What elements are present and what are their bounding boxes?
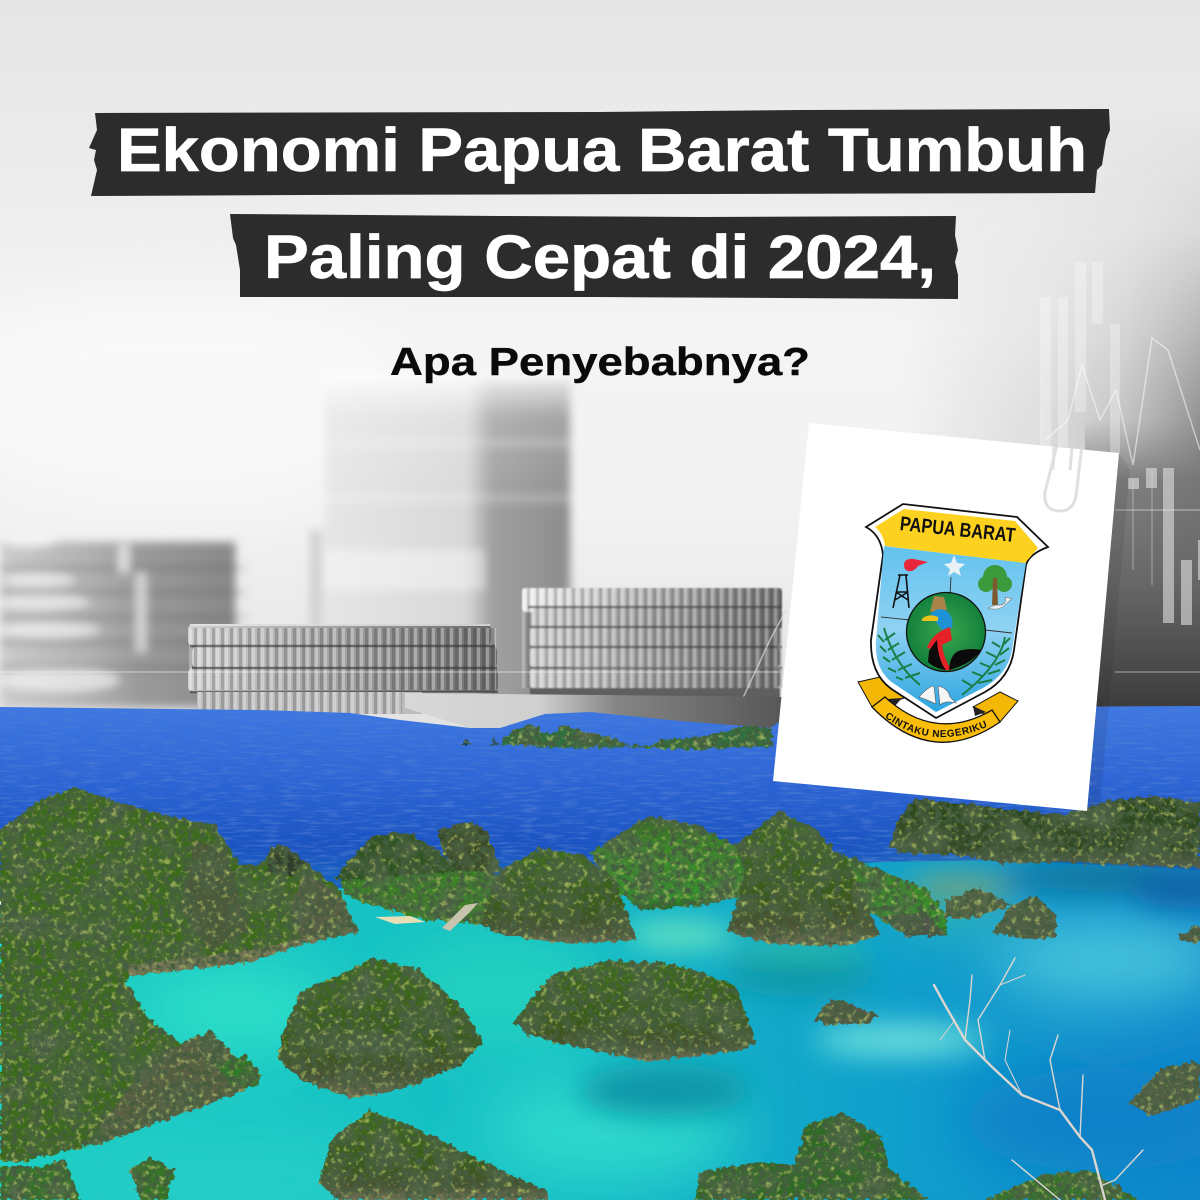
shield outline bbox=[866, 504, 1048, 718]
foreground island and trees bbox=[0, 1110, 1140, 1200]
title banner line 2 bbox=[230, 214, 958, 299]
lagoon water bbox=[0, 860, 1200, 1200]
emblem title: PAPUA BARAT bbox=[899, 513, 1016, 547]
divider lines bbox=[881, 577, 1012, 633]
shield blue field bbox=[876, 546, 1026, 712]
coin stack: right bbox=[522, 588, 786, 728]
icon: oil tower bbox=[893, 575, 909, 608]
white note paper bbox=[773, 423, 1119, 811]
islands: middle cones bbox=[480, 810, 1056, 946]
small rocks bbox=[813, 925, 1200, 1116]
distant island bbox=[461, 724, 772, 750]
icon: fish bbox=[988, 597, 1012, 609]
icon: star bbox=[944, 555, 965, 576]
ocean bbox=[0, 706, 1200, 900]
ribbon tails bbox=[858, 677, 1018, 722]
island: rounded centre left bbox=[280, 958, 483, 1098]
icon: tree bbox=[978, 565, 1012, 605]
islands: back middle row bbox=[335, 816, 1010, 936]
icon: flame bbox=[904, 559, 928, 571]
subtitle: Apa Penyebabnya? bbox=[390, 341, 810, 384]
fern left bbox=[878, 628, 920, 685]
emblem: Papua Barat coat of arms bbox=[857, 503, 1050, 743]
paper shadow bbox=[1086, 453, 1130, 811]
ribbon motto: CINTAKU NEGERIKU bbox=[886, 713, 986, 738]
coin stack: blurred left bbox=[0, 536, 245, 707]
coin stack: front bbox=[0, 624, 790, 730]
title line 2: Paling Cepat di 2024, bbox=[264, 223, 936, 291]
icon: hands motif bbox=[919, 686, 956, 705]
title banner line 1 bbox=[89, 109, 1110, 196]
title line 1: Ekonomi Papua Barat Tumbuh bbox=[117, 116, 1087, 184]
ribbon band bbox=[871, 696, 1001, 743]
pier bbox=[375, 903, 478, 931]
coin stack: tall blurred centre bbox=[310, 375, 570, 710]
island: large left landmass bbox=[0, 787, 358, 1162]
island: far right ridge bbox=[888, 796, 1200, 868]
grayscale background bbox=[0, 120, 1200, 728]
island: rounded centre bbox=[513, 960, 756, 1061]
bare white tree bbox=[934, 958, 1143, 1200]
fern right bbox=[962, 637, 1010, 695]
shield yellow top band bbox=[875, 509, 1038, 563]
background chart: candlesticks and line bbox=[1040, 262, 1200, 672]
icon: paperclip bbox=[1045, 445, 1082, 511]
green circle with cassowary bbox=[906, 592, 986, 672]
